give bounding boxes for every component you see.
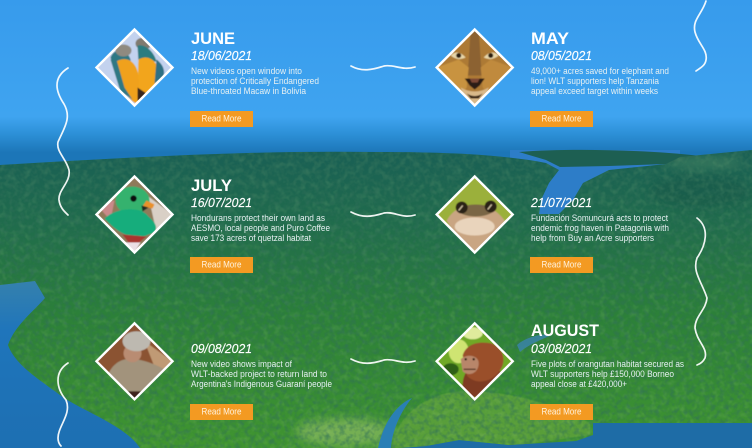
- date: 21/07/2021: [530, 196, 592, 210]
- panel: August: [437, 321, 685, 420]
- text block: [191, 359, 332, 389]
- text block: 49,000+ acres saved for elephant and: [531, 66, 669, 76]
- date: 03/08/2021: [531, 342, 592, 356]
- button: Read More: Read More: [202, 114, 242, 124]
- date: 16/07/2021: [191, 196, 252, 210]
- button: Read More: [530, 404, 593, 420]
- heading: August: AUGUST: [531, 321, 600, 340]
- text block: WLT-backed project to return land to: [191, 369, 327, 379]
- heading: July: JULY: [191, 176, 233, 195]
- text block: [531, 66, 669, 96]
- text block: New video shows impact of: [191, 359, 293, 369]
- button: Read More: Read More: [202, 260, 242, 270]
- panel: August video story: [96, 323, 332, 420]
- date: 18/06/2021: [191, 49, 252, 63]
- text block: AESMO, local people and Puro Coffee: [191, 223, 330, 233]
- text block: New videos open window into: [191, 66, 302, 76]
- heading: May: MAY: [531, 29, 570, 48]
- icon: macaws diamond photo: [96, 30, 172, 106]
- text block: [191, 213, 330, 243]
- icon: quetzal diamond photo: [96, 176, 172, 252]
- text block: Argentina's Indigenous Guaraní people: [191, 379, 332, 389]
- text block: [531, 213, 669, 243]
- text block: protection of Critically Endangered: [191, 76, 319, 86]
- heading: June: JUNE: [191, 29, 235, 48]
- button: Read More: [190, 111, 253, 127]
- icon: frog diamond photo: [437, 176, 513, 252]
- text block: [531, 359, 685, 389]
- text block: endemic frog haven in Patagonia with: [531, 223, 669, 233]
- text block: Five plots of orangutan habitat secured as: [531, 359, 685, 369]
- text block: help from Buy an Acre supporters: [531, 233, 655, 243]
- text block: Hondurans protect their own land as: [191, 213, 326, 223]
- date: 08/05/2021: [531, 49, 592, 63]
- button: Read More: [190, 257, 253, 273]
- text block: WLT supporters help £150,000 Borneo: [531, 369, 674, 379]
- text block: save 173 acres of quetzal habitat: [191, 233, 312, 243]
- button: Read More: Read More: [542, 406, 582, 416]
- panel: June: [96, 29, 319, 127]
- panel: July: [96, 176, 330, 273]
- button: Read More: [530, 257, 593, 273]
- icon: woman diamond photo: [96, 323, 172, 399]
- icon: orangutan diamond photo: [437, 323, 513, 399]
- text block: appeal close at £420,000+: [531, 379, 627, 389]
- button: Read More: Read More: [542, 114, 582, 124]
- icon: lion diamond photo: [437, 30, 513, 106]
- button: Read More: [530, 111, 593, 127]
- background: aerial rainforest landscape: [0, 124, 752, 448]
- date: 09/08/2021: [191, 342, 252, 356]
- text block: Blue-throated Macaw in Bolivia: [191, 86, 306, 96]
- panel: May: [437, 29, 669, 127]
- panel: July frog story: [437, 176, 669, 273]
- text block: lion! WLT supporters help Tanzania: [531, 76, 659, 86]
- text block: [191, 66, 319, 96]
- text block: appeal exceed target within weeks: [531, 86, 659, 96]
- text block: Fundación Somuncurá acts to protect: [531, 213, 669, 223]
- button: Read More: Read More: [202, 406, 242, 416]
- button: Read More: [190, 404, 253, 420]
- button: Read More: Read More: [542, 260, 582, 270]
